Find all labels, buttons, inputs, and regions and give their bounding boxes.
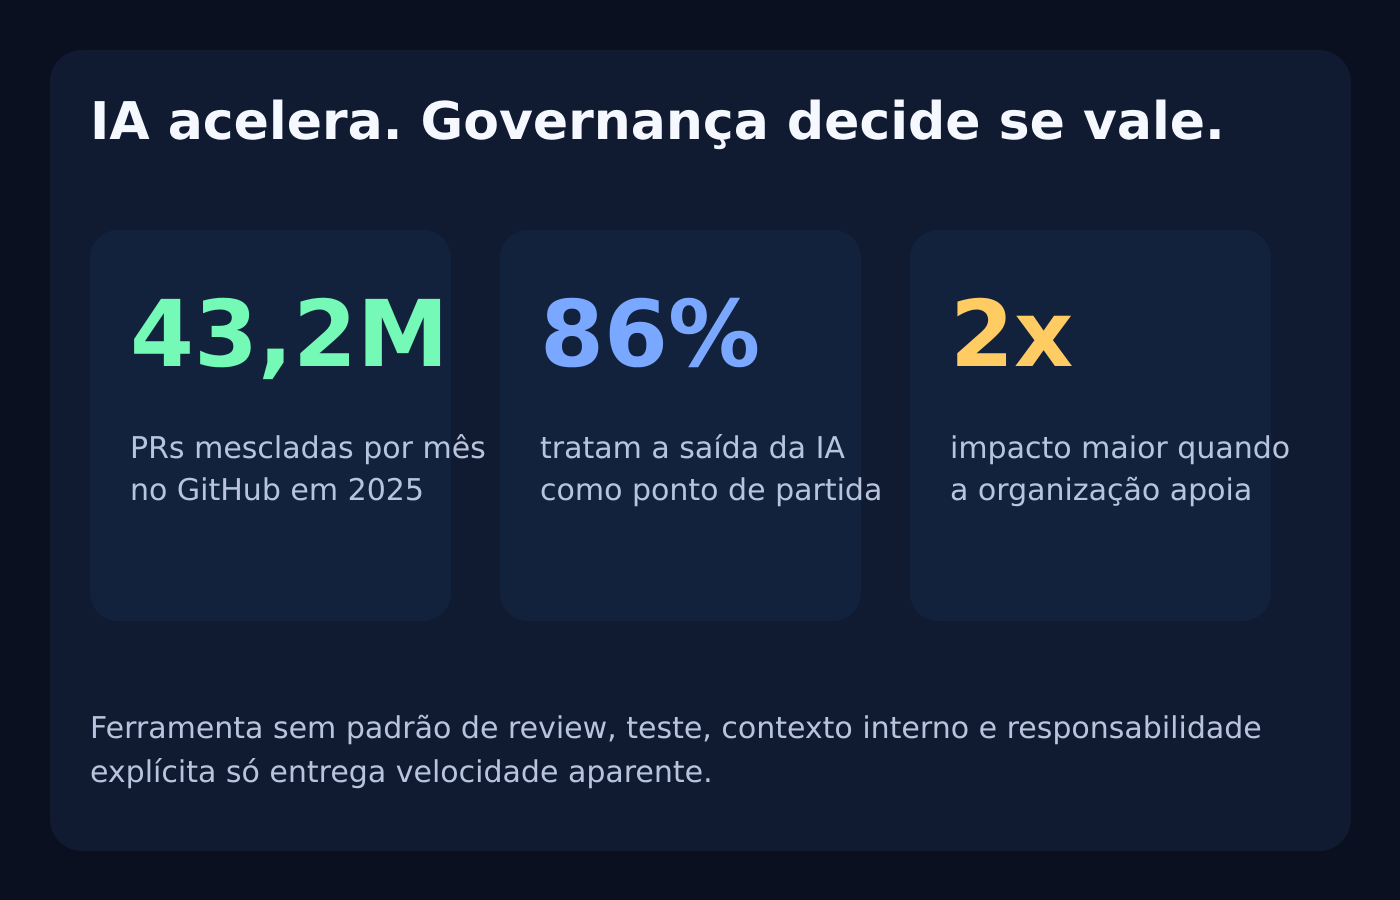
stat: 2x: 2x — [950, 281, 1073, 388]
footer text: Ferramenta sem padrão de review, teste, contexto interno e responsabilidade — [90, 711, 1262, 746]
stat description: no GitHub em 2025 — [130, 473, 424, 508]
footer text: explícita só entrega velocidade aparente. — [90, 755, 713, 790]
card: 86% — [500, 230, 882, 621]
stat description: impacto maior quando — [950, 431, 1290, 466]
stat: 86%: 86% — [540, 281, 760, 388]
card: 43,2M — [90, 230, 486, 621]
card: 2x — [910, 230, 1290, 621]
stat description: PRs mescladas por mês — [130, 431, 486, 466]
stat description: tratam a saída da IA — [540, 431, 845, 466]
title: IA acelera. Governança decide se vale. — [90, 92, 1225, 152]
stat description: a organização apoia — [950, 473, 1252, 508]
stat: 43,2M: 43,2M — [130, 281, 449, 388]
stat description: como ponto de partida — [540, 473, 882, 508]
